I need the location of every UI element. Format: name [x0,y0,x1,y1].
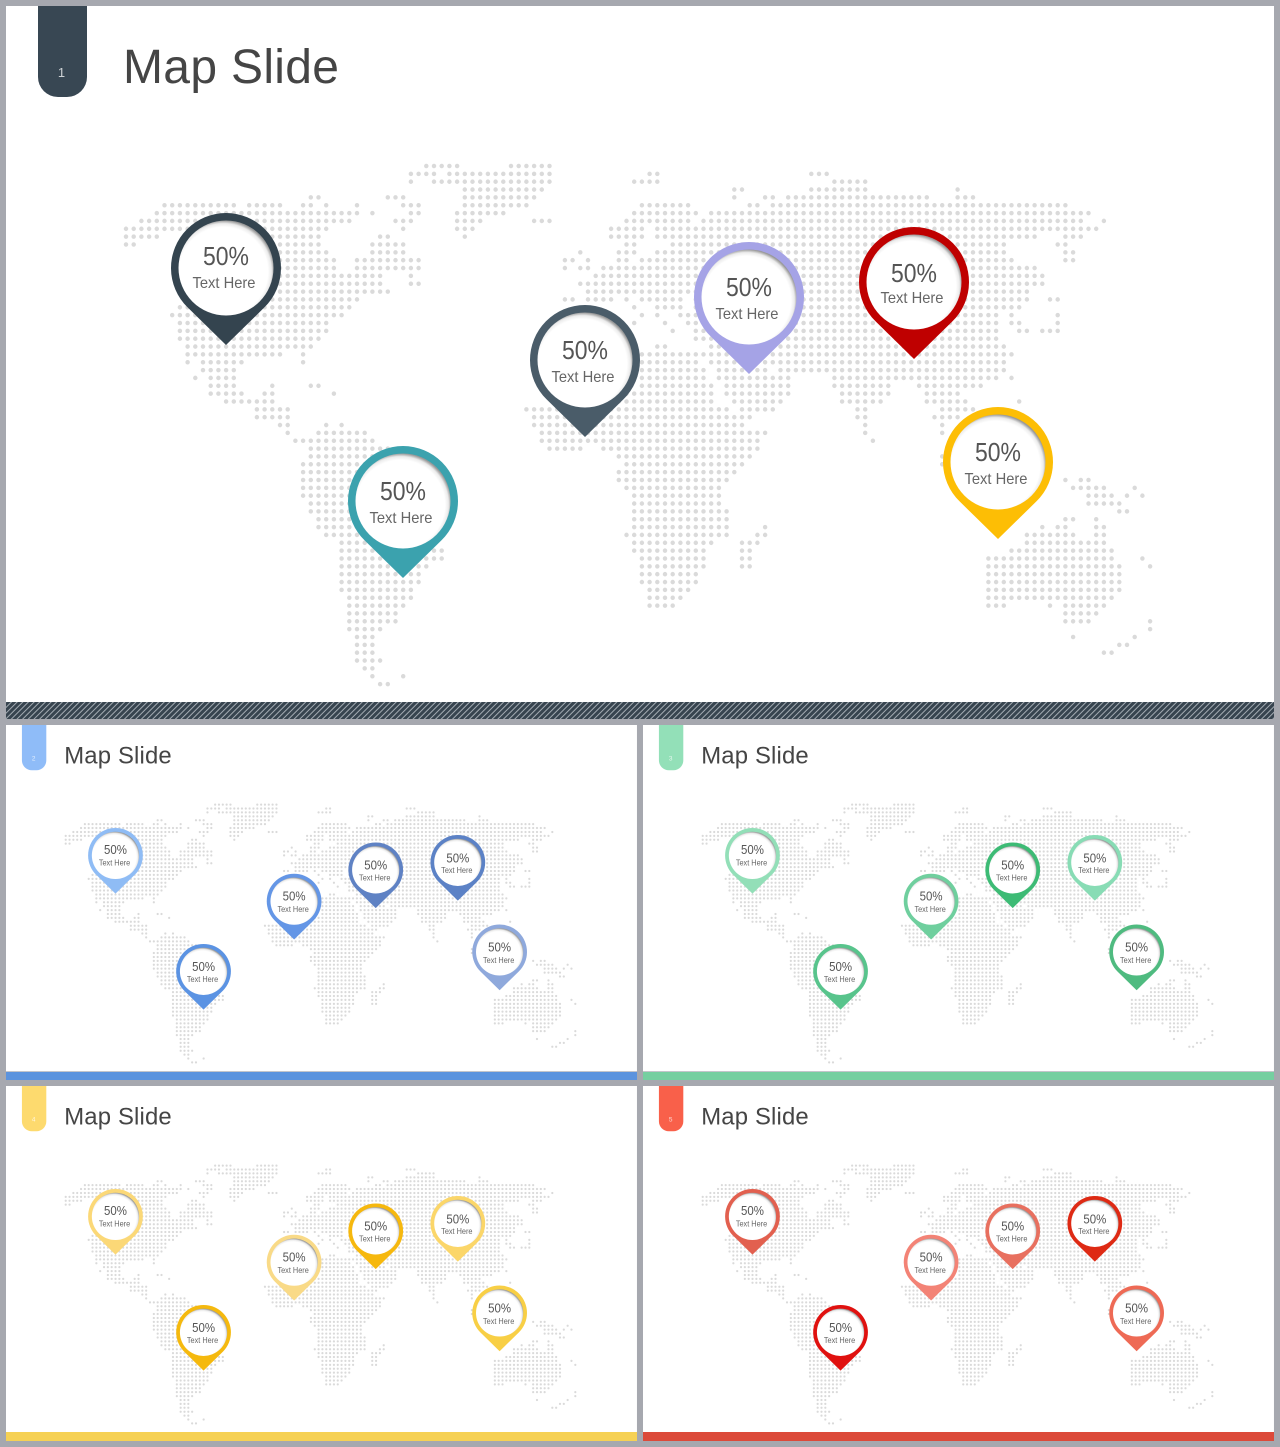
title: Map Slide [64,742,172,769]
pin: East Asia [859,227,969,359]
pin: South America [176,1305,231,1371]
pin: Middle East [348,842,403,908]
pin: Middle East: 50% [726,272,772,302]
pin: South America: 50% [829,1320,852,1335]
pin: East Asia: Text Here [880,290,944,307]
pin: Southeast Asia: 50% [1125,939,1149,954]
dotted world map [703,1166,1213,1423]
dotted world map [66,805,576,1062]
dotted world map [66,1166,576,1423]
pin: South America: Text Here [187,975,219,984]
pin: South America: Text Here [187,1336,219,1345]
dotted world map [703,805,1213,1062]
panel: blue map slide [6,725,637,1071]
pin: Middle East: 50% [1001,1218,1025,1233]
pin: Southeast Asia: 50% [488,1300,512,1315]
pin: Middle East: 50% [1001,857,1025,872]
pin: Africa: 50% [920,889,943,904]
pin: Africa: Text Here [914,905,946,914]
pin: Middle East: 50% [364,1218,388,1233]
pin: North America: Text Here [192,275,256,292]
pin: Africa: Text Here [552,369,615,386]
pin: Middle East: Text Here [996,874,1028,883]
pin: East Asia: 50% [446,850,470,865]
pin: Middle East: Text Here [359,874,391,883]
pin: South America [813,944,868,1010]
pin: North America: Text Here [99,858,131,867]
pin: Southeast Asia: Text Here [1120,1317,1152,1326]
title: Map Slide [701,742,809,769]
pin: South America: 50% [829,959,852,974]
slide number tab [659,1086,683,1131]
pin: East Asia: Text Here [441,1227,473,1236]
title: Map Slide [701,1103,809,1130]
pin: Middle East [694,242,804,374]
pin: East Asia: Text Here [1078,866,1110,875]
pin: North America: 50% [203,241,249,271]
pin: East Asia [1067,1196,1122,1262]
pin: Africa: 50% [562,335,608,365]
pin: South America: Text Here [824,1336,856,1345]
slide number tab: 5 [669,1116,673,1123]
pin: North America: 50% [741,842,764,857]
pin: South America: 50% [192,1320,215,1335]
pin: North America [725,1189,780,1255]
pin: Southeast Asia: Text Here [483,1317,515,1326]
pin: East Asia [1067,835,1122,901]
green footer bar [643,1072,1274,1080]
pin: South America [813,1305,868,1371]
pin: Africa: 50% [920,1250,943,1265]
pin: Southeast Asia [1109,925,1164,990]
pin: Middle East: Text Here [359,1235,391,1244]
pin: North America: 50% [104,842,127,857]
pin: South America: Text Here [824,975,856,984]
pin: Southeast Asia: 50% [488,939,512,954]
pin: East Asia: 50% [891,258,937,288]
pin: Africa: Text Here [277,905,309,914]
pin: South America: Text Here [370,510,433,527]
pin: South America: 50% [192,959,215,974]
slide number tab [659,725,683,770]
hatched divider band [6,702,1274,719]
pin: East Asia: Text Here [1078,1227,1110,1236]
pin: Southeast Asia [1109,1286,1164,1351]
pin: Southeast Asia [943,407,1053,539]
pin: Africa [904,874,958,939]
pin: North America: 50% [741,1203,764,1218]
pin: North America: Text Here [736,858,768,867]
pin: Africa [267,874,321,939]
slide number tab: 1 [58,65,65,80]
pin: Southeast Asia: Text Here [1120,956,1152,965]
pin: East Asia: 50% [1083,1211,1107,1226]
yellow footer bar [6,1432,637,1441]
slide number tab: 2 [32,755,36,762]
pin: Southeast Asia: 50% [1125,1300,1149,1315]
pin: Southeast Asia: Text Here [964,471,1028,488]
pin: Africa [904,1235,958,1300]
panel: red map slide [643,1086,1274,1432]
pin: Africa [530,305,640,437]
pin: Africa: Text Here [277,1266,309,1275]
dotted world map [126,166,1151,684]
pin: East Asia: 50% [1083,850,1107,865]
pin: Middle East: 50% [364,857,388,872]
title: Map Slide [64,1103,172,1130]
pin: Middle East: Text Here [716,306,779,323]
title: Map Slide [123,41,339,94]
pin: Middle East [985,842,1040,908]
pin: South America [348,446,458,578]
pin: Africa: 50% [283,1250,306,1265]
pin: South America [176,944,231,1010]
pin: Southeast Asia [472,925,527,990]
red footer bar [643,1432,1274,1441]
pin: North America [171,213,281,345]
pin: South America: 50% [380,476,426,506]
pin: Africa: Text Here [914,1266,946,1275]
pin: East Asia [430,835,485,901]
pin: Southeast Asia: Text Here [483,956,515,965]
panel: yellow map slide [6,1086,637,1432]
pin: East Asia: 50% [446,1211,470,1226]
blue footer bar [6,1072,637,1080]
pin: East Asia [430,1196,485,1262]
panel: main map slide [6,6,1274,702]
pin: Middle East [985,1203,1040,1269]
pin: North America: Text Here [99,1219,131,1228]
pin: North America: 50% [104,1203,127,1218]
pin: Africa [267,1235,321,1300]
pin: Africa: 50% [283,889,306,904]
pin: North America: Text Here [736,1219,768,1228]
slide number tab [22,1086,46,1131]
pin: East Asia: Text Here [441,866,473,875]
pin: North America [88,828,143,894]
slide number tab: 4 [32,1116,36,1123]
panel: green map slide [643,725,1274,1071]
pin: Middle East: Text Here [996,1235,1028,1244]
pin: North America [88,1189,143,1255]
slide number tab [38,6,87,97]
slide number tab [22,725,46,770]
pin: Southeast Asia [472,1286,527,1351]
pin: Middle East [348,1203,403,1269]
pin: North America [725,828,780,894]
pin: Southeast Asia: 50% [975,437,1021,467]
slide number tab: 3 [669,755,673,762]
